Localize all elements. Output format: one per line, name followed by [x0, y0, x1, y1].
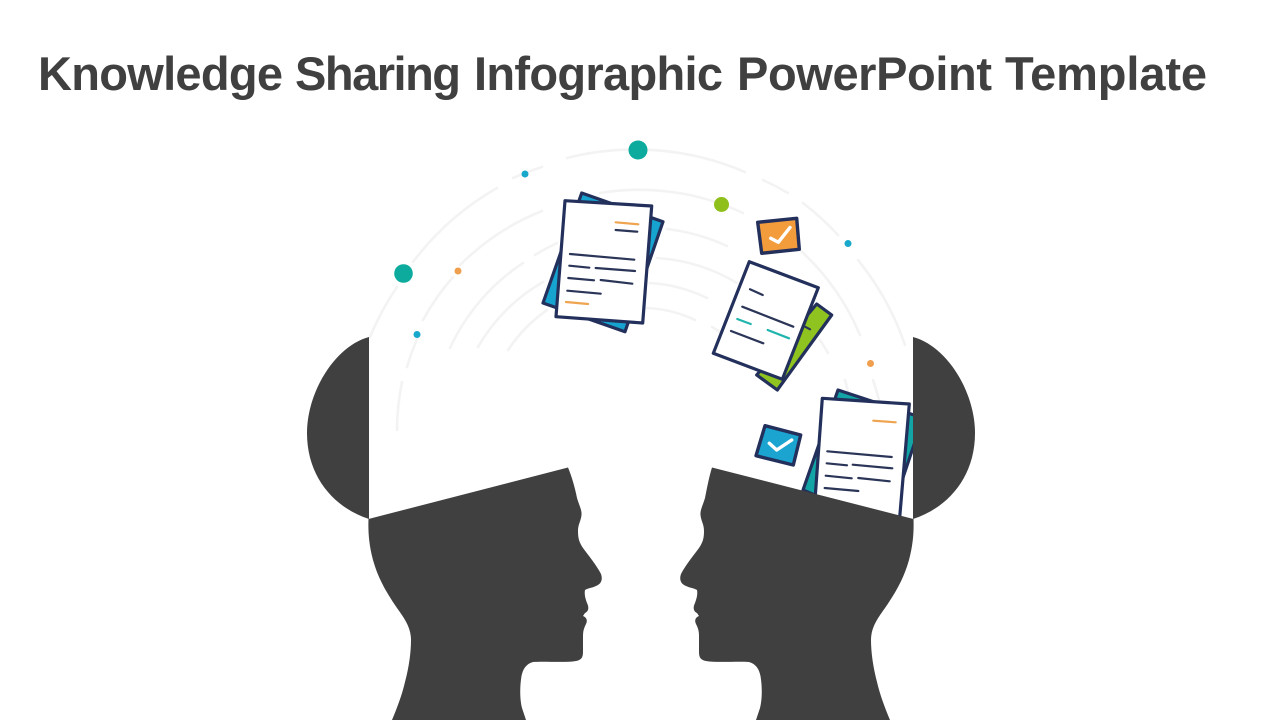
title: Infographic — [474, 47, 723, 100]
document: top left with blue backing — [543, 193, 663, 332]
icon: orange checkbox — [758, 218, 799, 253]
title: Template — [1005, 47, 1207, 100]
title: Knowledge — [38, 47, 283, 100]
document: lower right with teal backing — [801, 388, 913, 516]
title: Sharing — [295, 47, 461, 100]
right head silhouette — [680, 337, 975, 720]
icon: blue checkbox — [756, 426, 801, 465]
document: middle right with green backing — [713, 262, 832, 390]
decorative dots — [394, 140, 874, 367]
title: PowerPoint — [737, 47, 992, 100]
left head silhouette — [307, 337, 602, 720]
